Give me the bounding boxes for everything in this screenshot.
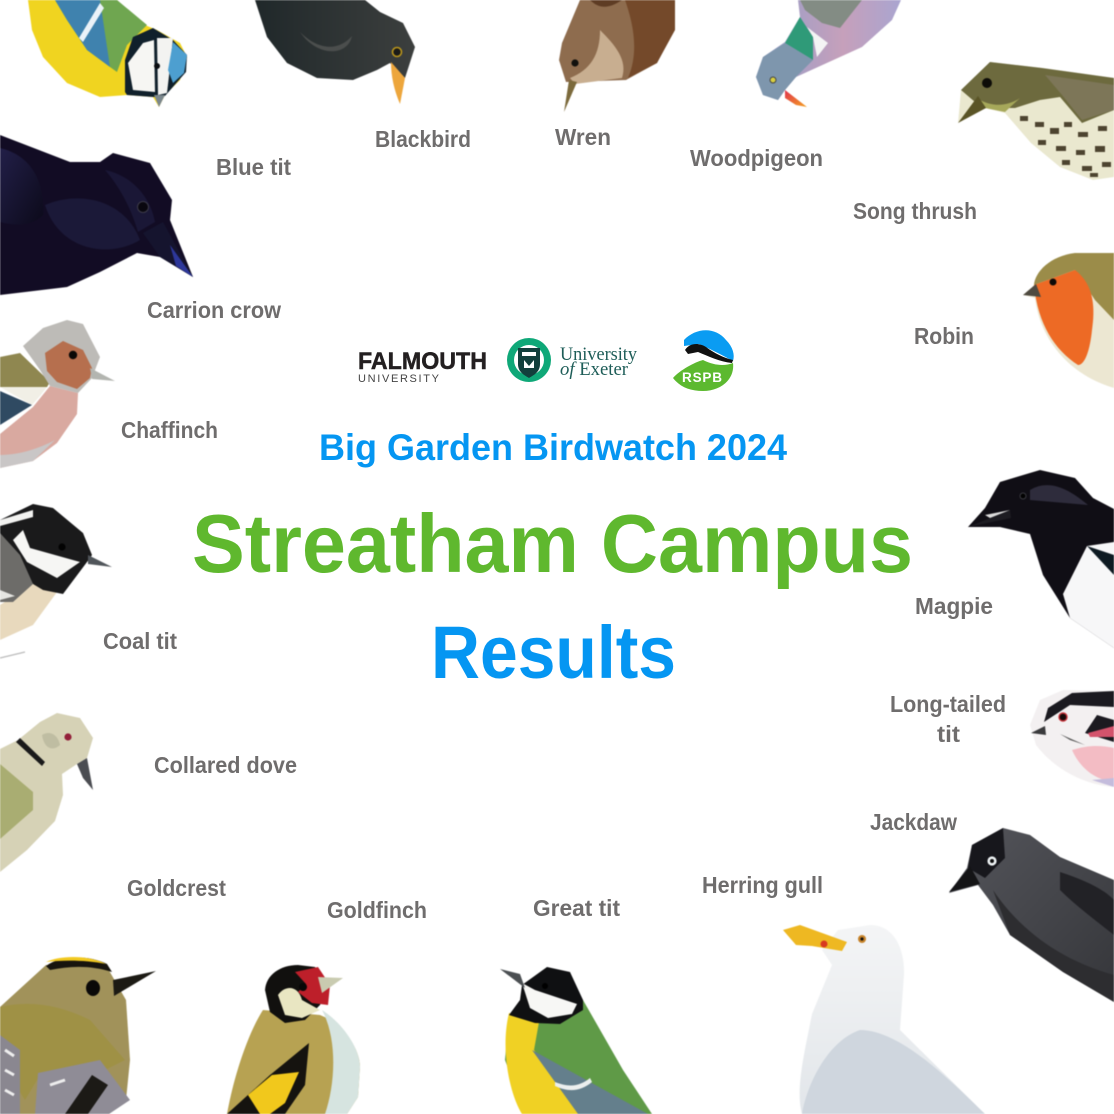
icon: goldcrest [0, 957, 156, 1114]
icon: chaffinch [0, 320, 115, 468]
heading: Big Garden Birdwatch 2024: Big Garden Birdwatch 2024 [319, 427, 787, 468]
label: Magpie: Magpie [915, 593, 993, 619]
label: Blackbird: Blackbird [375, 126, 471, 152]
label: Great tit: Great tit [533, 895, 620, 921]
label: Carrion crow: Carrion crow [147, 297, 281, 323]
icon: coal tit [0, 504, 112, 658]
icon: robin [1023, 253, 1114, 388]
label: Long-tailed tit [890, 691, 1006, 747]
label: Woodpigeon: Woodpigeon [690, 145, 823, 171]
label: Goldcrest: Goldcrest [127, 875, 226, 901]
icon: great tit [500, 967, 652, 1114]
icon: long-tailed tit [1030, 690, 1114, 787]
logo: RSPB: RSPB [682, 370, 723, 385]
logo: University of Exeter [507, 338, 637, 382]
logo: University of Exeter: University [560, 344, 637, 365]
icon: magpie [968, 470, 1114, 648]
title: Results: Results [431, 611, 676, 694]
label: Robin: Robin [914, 323, 974, 349]
label: Chaffinch: Chaffinch [121, 417, 218, 443]
icon: wren [559, 0, 675, 112]
label: Long-tailed tit: tit [937, 721, 960, 747]
logo: University of Exeter: of Exeter [560, 359, 629, 380]
icon: goldfinch [227, 965, 360, 1114]
label: Blue tit: Blue tit [216, 154, 291, 180]
title: Streatham Campus: Streatham Campus [192, 497, 913, 590]
logo: Falmouth University: UNIVERSITY [358, 373, 440, 385]
icon: carrion crow [0, 135, 193, 295]
icon: jackdaw [949, 828, 1114, 1002]
icon: blackbird [255, 0, 415, 104]
label: Song thrush: Song thrush [853, 198, 977, 224]
label: Long-tailed tit: Long-tailed [890, 691, 1006, 717]
label: Herring gull: Herring gull [702, 872, 823, 898]
label: Wren: Wren [555, 124, 611, 150]
icon: woodpigeon [756, 0, 901, 107]
label: Goldfinch: Goldfinch [327, 897, 427, 923]
label: Collared dove: Collared dove [154, 752, 297, 778]
icon: song thrush [958, 62, 1114, 180]
icon: collared dove [0, 713, 93, 872]
icon: blue tit [28, 0, 187, 107]
logo: Falmouth University: FALMOUTH [358, 348, 487, 375]
label: Coal tit: Coal tit [103, 628, 177, 654]
logo: RSPB [673, 330, 734, 391]
label: Jackdaw: Jackdaw [870, 809, 957, 835]
icon: herring gull [783, 925, 985, 1114]
